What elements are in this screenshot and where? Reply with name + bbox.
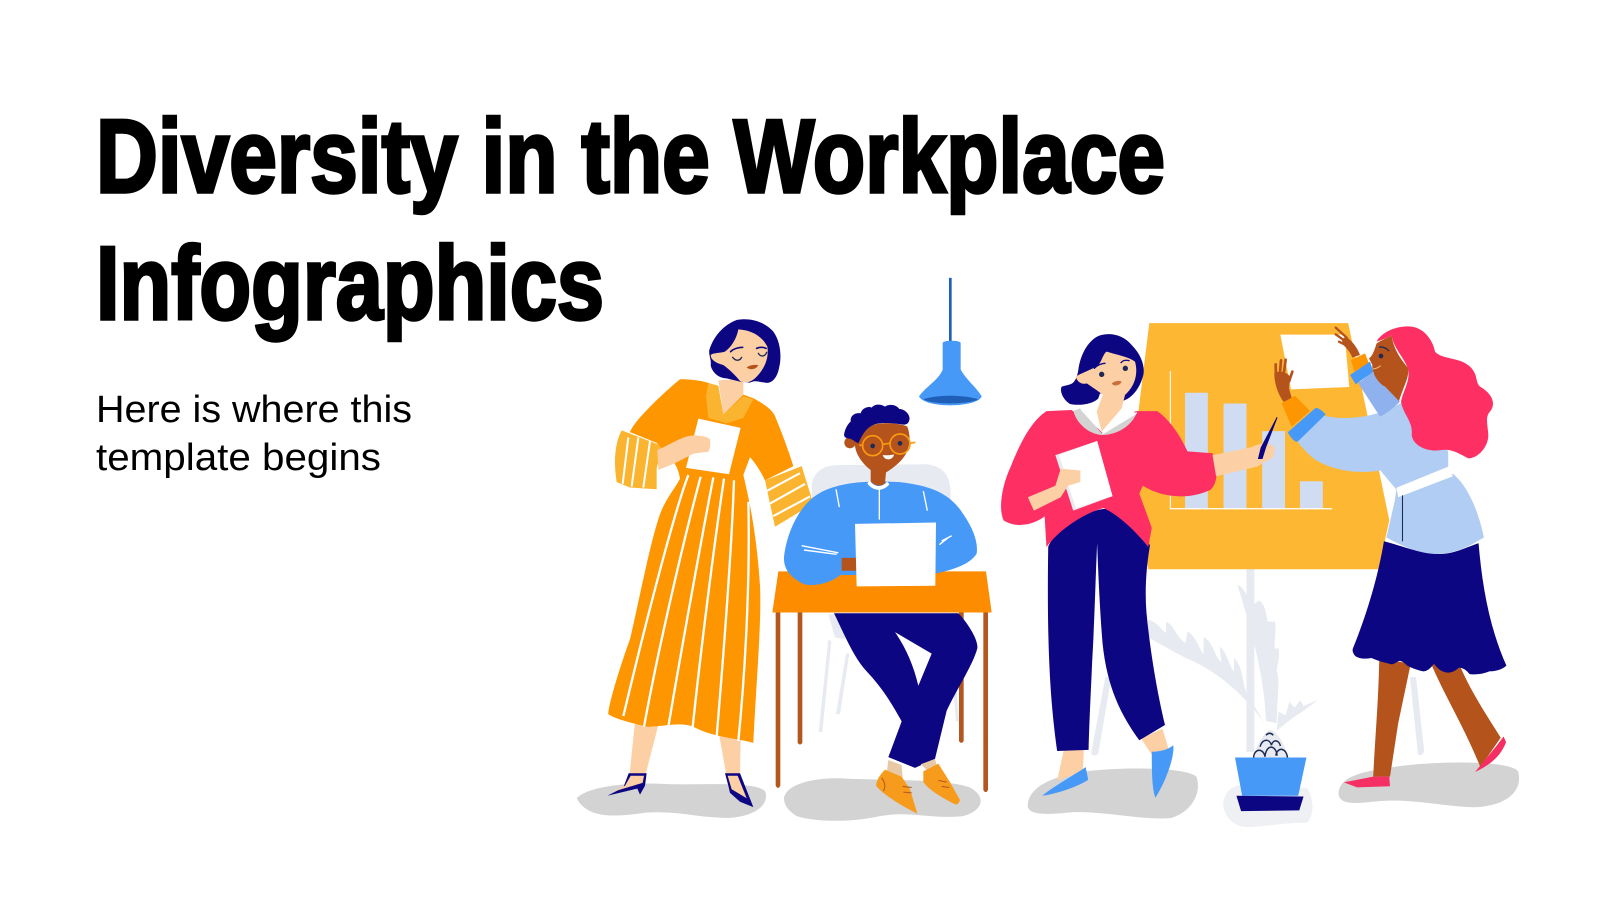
legs [629,721,741,777]
shoes [876,764,960,814]
belt [1396,467,1453,497]
lower hand [1274,360,1292,402]
flat shoes [1042,745,1173,798]
floor shadow: standing woman [577,783,766,818]
feet [1057,729,1169,780]
pointing arm [1212,442,1275,476]
title: Diversity in the Workplace [96,99,1165,215]
floor shadow: woman in red [1028,769,1198,818]
sweater [1001,410,1217,547]
forearm [842,558,857,571]
table legs [776,611,988,792]
dress [608,379,793,743]
bar chart on board [1170,371,1332,509]
trousers [1048,509,1165,751]
left sleeve cuff [615,430,663,489]
collar [706,383,753,423]
head: woman in orange dress [709,319,780,383]
plant fronds [1148,585,1318,731]
dress pleats [623,475,749,741]
orange undersleeves [1282,353,1369,427]
subtitle: template begins [96,437,381,479]
head and arms: woman with pink hair [1274,326,1493,458]
subtitle: Here is where this [96,389,412,431]
presentation board [1137,323,1389,569]
woman in orange dress [607,379,847,807]
seated man at desk [772,464,992,814]
illustration: left group [577,278,992,821]
skirt [1353,541,1506,674]
upper hand [1336,328,1360,358]
floor shadow: woman with pink hair [1339,763,1519,807]
sweater [784,482,977,585]
pot shadow [1223,784,1312,827]
trousers [834,613,977,768]
raised sleeve [1358,372,1400,417]
arm holding document [657,435,710,470]
title [96,99,1165,342]
hand on shoulder [797,511,847,531]
chair [812,464,959,732]
pen [1258,417,1277,459]
woman in red sweater [1001,410,1277,798]
arm with document [1028,469,1080,511]
right sleeve cuff [765,466,813,527]
pendant lamp [919,278,982,405]
legs [1373,658,1501,777]
table top [772,571,992,612]
illustration: right group [1001,323,1519,827]
floor shadow: seated man [784,778,981,821]
face [1369,336,1408,401]
shoes [1344,736,1506,787]
head: woman in red sweater [1061,334,1144,435]
blue cuffs [1288,362,1373,442]
blouse [1296,402,1484,554]
subtitle [96,389,412,479]
head: seated man [844,405,915,490]
document [1055,441,1112,511]
title: Infographics [96,226,604,342]
woman with pink hair: body [1296,402,1506,787]
note on board [1280,335,1349,389]
neck [718,379,743,414]
heels [607,773,753,807]
potted cactus [1235,730,1306,811]
sweater creases [802,487,952,554]
easel stand [1091,568,1424,756]
laptop [855,522,936,586]
pink hair [1377,326,1493,458]
socks [887,759,937,778]
document [686,419,741,474]
gap between legs [895,632,932,686]
blouse seam [1401,495,1404,541]
